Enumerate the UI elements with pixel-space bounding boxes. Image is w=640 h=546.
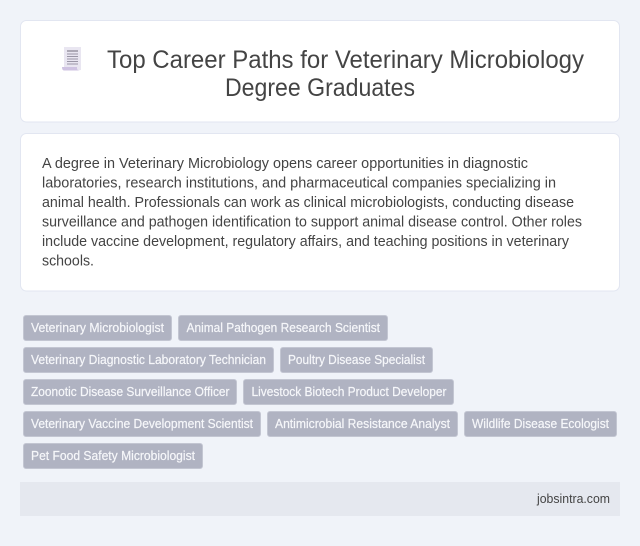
description text: A degree in Veterinary Microbiology opens career opportunities in diagnostic: [42, 156, 528, 172]
career tags: [24, 316, 616, 468]
tag: Veterinary Microbiologist: [24, 316, 172, 340]
tag: Antimicrobial Resistance Analyst: [268, 412, 458, 436]
tag: Veterinary Vaccine Development Scientist: [24, 412, 260, 436]
tag: Livestock Biotech Product Developer: [244, 380, 454, 404]
description text: [42, 156, 582, 270]
description text: include vaccine development, regulatory affairs, and teaching positions in veterinary: [42, 234, 570, 250]
tag: Veterinary Diagnostic Laboratory Technician: [24, 348, 274, 372]
title: [107, 46, 584, 102]
tag: Pet Food Safety Microbiologist: [24, 444, 202, 468]
tag: Antimicrobial Resistance Analyst: Antimicrobial Resistance Analyst: [275, 417, 451, 431]
description text: laboratories, research institutions, and pharmaceutical companies specializing in: [42, 176, 556, 192]
title: Top Career Paths for Veterinary Microbiology: [107, 46, 584, 74]
description text: surveillance and pathogen identification to support animal disease control. Other roles: [42, 214, 582, 230]
footer: [20, 482, 620, 516]
tag: Poultry Disease Specialist: [280, 348, 432, 372]
tag: Veterinary Vaccine Development Scientist: Veterinary Vaccine Development Scientist: [31, 417, 253, 431]
tag: Veterinary Diagnostic Laboratory Technician: Veterinary Diagnostic Laboratory Technician: [31, 353, 266, 367]
tag: Wildlife Disease Ecologist: Wildlife Disease Ecologist: [472, 417, 610, 431]
description text: animal health. Professionals can work as clinical microbiologists, conducting disease: [42, 195, 574, 211]
tag: Livestock Biotech Product Developer: Livestock Biotech Product Developer: [252, 385, 446, 399]
tag: Wildlife Disease Ecologist: [464, 412, 616, 436]
panel: header: [20, 20, 620, 122]
tag: Poultry Disease Specialist: Poultry Disease Specialist: [288, 353, 425, 367]
title: Degree Graduates: [225, 74, 415, 102]
tag: Animal Pathogen Research Scientist: [178, 316, 388, 340]
tag: Pet Food Safety Microbiologist: Pet Food Safety Microbiologist: [31, 449, 196, 463]
panel: description: [20, 134, 620, 291]
tag: Animal Pathogen Research Scientist: Animal Pathogen Research Scientist: [186, 321, 380, 335]
tag: Zoonotic Disease Surveillance Officer: Zoonotic Disease Surveillance Officer: [31, 385, 230, 399]
tag: Zoonotic Disease Surveillance Officer: [24, 380, 236, 404]
description text: schools.: [42, 254, 94, 270]
icon: document scroll: [62, 47, 81, 70]
footer: jobsintra.com: [536, 492, 610, 506]
tag: Veterinary Microbiologist: Veterinary Microbiologist: [31, 321, 165, 335]
